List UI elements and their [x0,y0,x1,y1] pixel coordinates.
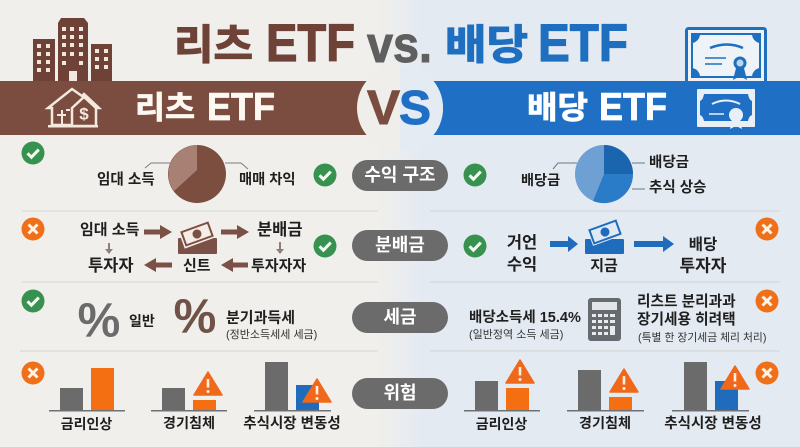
risk charts: dividends [464,360,762,432]
title: 리츠 [174,22,253,68]
tax: REITs: (정반소득세세 세금) [226,328,317,341]
icon: city buildings [33,18,112,81]
banner heading: dividend ETF [527,86,667,129]
arrows [550,236,674,252]
pill: risk [352,378,448,409]
title: ETF [266,14,355,73]
chart: interest rate [464,360,540,432]
pill: tax [352,302,448,333]
status icon: row 3 left [22,290,44,312]
title: 배당 [445,22,528,68]
pie label: rental income: 임대 소득 [97,171,155,188]
pie chart: REITs income [97,145,296,203]
pill: distributions: 분배금 [375,235,425,255]
chart: interest rate [49,368,125,432]
status icon: row 2 left [22,218,44,240]
chart: recession [567,369,644,432]
status icon: row 2 centre left [314,234,336,258]
flow: dividend payment: 지금 [590,258,618,274]
banner heading: REITs ETF: ETF [207,86,275,129]
flow: dividend payment: 배당 [689,236,717,254]
banner: dividend ETF [428,81,800,135]
icon: cash wallet [178,220,217,254]
tax: dividends: 배당소득세 15.4% [469,309,581,326]
status icon: row 2 right [756,218,778,240]
arrows [144,225,249,272]
pie chart: dividend income [521,145,706,203]
tax: dividends: 리츠트 분리과과 [637,293,736,310]
flow: dividend payment [507,218,727,276]
title: ETF [538,14,628,73]
flow: REITs distribution: 분배금 [257,220,303,239]
icon: percent brown: % [174,290,216,344]
tax: dividends [469,293,766,344]
pill: income structure [352,160,448,191]
icon: banner certificate [697,89,755,129]
pill: risk: 위험 [383,383,417,403]
pie label: share price growth: 추식 상승 [649,179,706,196]
VS badge: V [367,82,400,135]
status icon: row 1 centre right [464,164,486,186]
chart: recession: 경기침체 [579,416,631,432]
pill: distributions [352,230,448,261]
pie label: dividends right: 배당금 [649,154,689,171]
pie label: trading gain: 매매 차익 [239,171,296,188]
icon: blue cash wallet [585,218,624,254]
icon: percent gray: % [78,294,120,348]
chart: market volatility [664,362,762,432]
status icon: row 1 left [22,142,44,164]
tax: REITs [78,290,317,348]
pie label: dividends left: 배당금 [521,173,560,189]
pill: tax: 세금 [383,307,417,327]
flow: REITs distribution: 투자자자 [251,258,306,274]
icon: calculator [588,298,621,341]
VS badge: S [399,82,431,135]
icon: house with dollar: $ [79,104,89,124]
chart: recession: 경기침체 [163,416,215,432]
risk charts: REITs [49,362,341,432]
flow: REITs distribution: 신트 [183,258,211,274]
tax: dividends: 장기세용 히려택 [637,311,736,328]
tax: REITs: 분기과득세 [226,310,295,326]
flow: dividend payment: 수익 [507,255,537,274]
status icon: row 2 centre right [464,234,486,258]
flow: dividend payment: 거언 [507,233,537,252]
chart: market volatility: 추식시장 변동성 [243,415,341,432]
chart: interest rate: 금리인상 [476,416,527,432]
tax: dividends: (일반정역 소득 세금) [469,327,563,341]
flow: REITs distribution: 임대 소득 [80,222,140,238]
status icon: row 4 right [756,362,778,384]
status icon: row 1 centre left [314,164,336,186]
flow: dividend payment: 투자자 [680,256,727,276]
title [174,14,628,73]
status icon: row 4 left [22,362,44,384]
banner heading: REITs ETF [135,86,275,129]
banner heading: REITs ETF: 리츠 [135,90,195,126]
pill: income structure: 수익 구조 [364,165,436,185]
icon: certificate [686,28,766,84]
banner: REITs ETF [0,81,372,135]
icon: house with dollar [48,89,99,128]
VS badge [357,65,443,151]
status icon: row 3 right [756,290,778,312]
flow: REITs distribution [80,220,306,275]
chart: interest rate: 금리인상 [61,416,112,432]
chart: market volatility: 추식시장 변동성 [664,415,762,432]
chart: recession [151,372,227,432]
tax: REITs: 일반 [129,313,155,329]
chart: market volatility [243,362,341,432]
title: vs. [367,16,432,73]
flow: REITs distribution: 투자자 [88,256,134,275]
banner heading: dividend ETF: ETF [599,86,667,129]
tax: dividends: (특별 한 장기세금 체리 처리) [638,331,766,344]
banner heading: dividend ETF: 배당 [527,90,588,126]
